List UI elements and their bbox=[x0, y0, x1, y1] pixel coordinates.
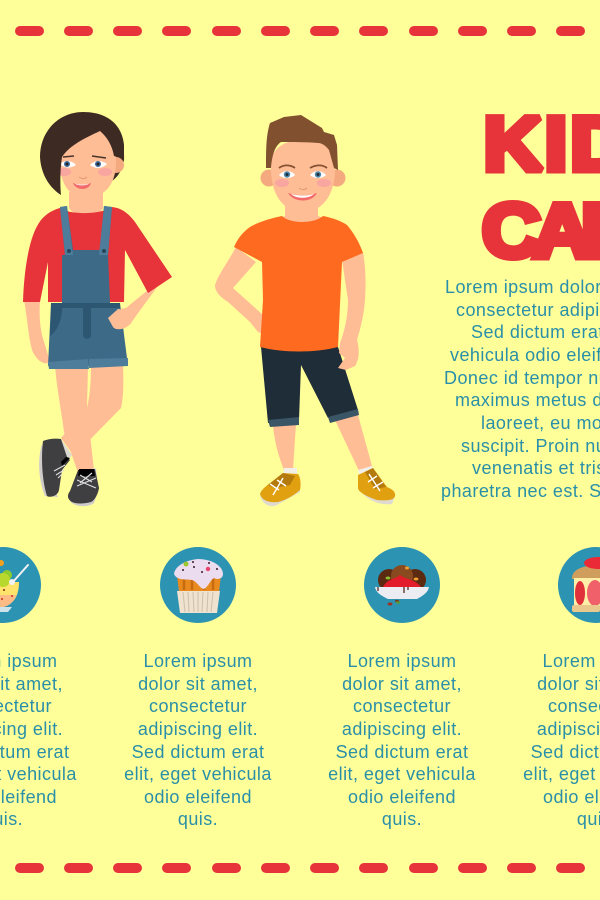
boy shoes bbox=[260, 468, 395, 506]
column text: second: odio eleifend bbox=[144, 787, 252, 807]
girl head bbox=[40, 112, 124, 198]
column text: second: Sed dictum erat bbox=[132, 742, 264, 762]
icon: ice cream sundae bbox=[0, 547, 41, 623]
title bbox=[482, 101, 600, 273]
girl overalls bbox=[48, 206, 128, 369]
girl hair back bbox=[100, 120, 124, 182]
column text: second: dolor sit amet, bbox=[138, 674, 258, 694]
boy neck bbox=[281, 205, 324, 223]
column text: third: Lorem ipsum bbox=[348, 651, 456, 671]
icon: strawberry cake bbox=[558, 547, 600, 623]
girl left arm bbox=[24, 300, 50, 363]
illustration: girl in denim overalls bbox=[23, 112, 172, 506]
column text: third: odio eleifend bbox=[348, 787, 456, 807]
boy legs bbox=[273, 415, 372, 471]
icon: cupcake bbox=[160, 547, 236, 623]
column text: third: adipiscing elit. bbox=[342, 719, 462, 739]
column text: first bbox=[0, 651, 77, 829]
boy orange shirt bbox=[234, 216, 363, 352]
intro text block bbox=[441, 277, 600, 501]
boy arms bbox=[215, 247, 366, 370]
column text: third: quis. bbox=[382, 809, 422, 829]
column text: third: elit, eget vehicula bbox=[328, 764, 476, 784]
column text: fourth bbox=[523, 651, 600, 829]
boy head bbox=[260, 115, 346, 212]
girl right forearm bbox=[108, 283, 160, 329]
column text: second: elit, eget vehicula bbox=[124, 764, 272, 784]
column text: second: consectetur bbox=[149, 696, 247, 716]
column text: third: dolor sit amet, bbox=[342, 674, 462, 694]
girl hand on hip bbox=[108, 309, 132, 329]
girl legs bbox=[55, 366, 123, 470]
column text: second: Lorem ipsum bbox=[144, 651, 252, 671]
girl neck bbox=[69, 192, 103, 214]
boy socks bbox=[283, 466, 375, 477]
girl shoes bbox=[39, 439, 99, 506]
icon: chocolate dessert plate bbox=[364, 547, 440, 623]
boy shorts bbox=[261, 347, 359, 427]
column text: second: quis. bbox=[178, 809, 218, 829]
girl red top bbox=[23, 207, 172, 302]
column text: third: Sed dictum erat bbox=[336, 742, 468, 762]
column text: third bbox=[328, 651, 476, 829]
column text: third: consectetur bbox=[353, 696, 451, 716]
illustration: boy in orange t-shirt bbox=[215, 115, 395, 506]
column text: second: adipiscing elit. bbox=[138, 719, 258, 739]
column text: second bbox=[124, 651, 272, 829]
